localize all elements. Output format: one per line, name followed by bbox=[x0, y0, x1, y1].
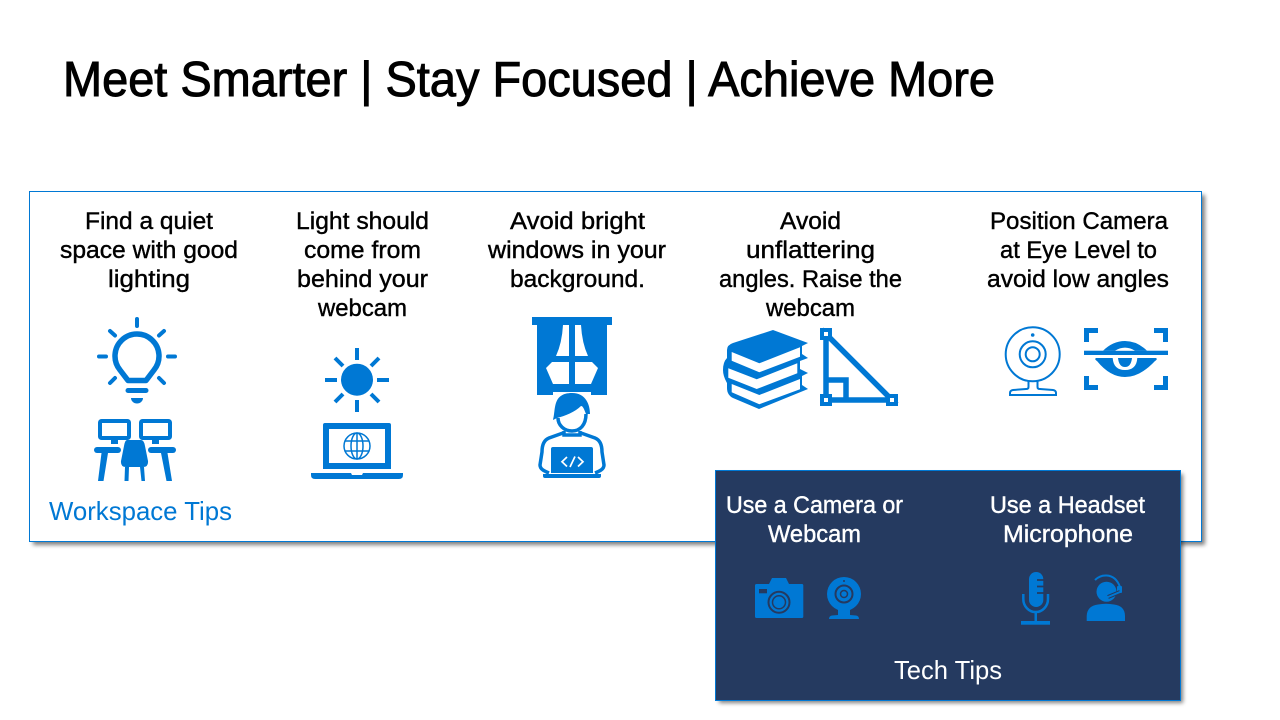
text: light behind webcam: Light should bbox=[296, 208, 429, 235]
icon: right triangle bbox=[820, 328, 898, 406]
icon: headset person bbox=[1087, 575, 1125, 621]
text: position camera at eye level: at Eye Level to bbox=[1000, 237, 1157, 264]
text: use a headset microphone: Microphone bbox=[1003, 521, 1133, 548]
icon: eye scan bbox=[1084, 328, 1168, 390]
title: Meet Smarter | Stay Focused | Achieve More bbox=[63, 53, 995, 107]
text: find a quiet space: space with good bbox=[60, 237, 238, 264]
text: find a quiet space: Find a quiet bbox=[85, 208, 213, 235]
text: light behind webcam: come from bbox=[304, 237, 421, 264]
text: position camera at eye level: avoid low angles bbox=[987, 266, 1169, 293]
label: workspace tips: Workspace Tips bbox=[49, 496, 232, 526]
icon: person with laptop bbox=[540, 393, 604, 478]
text: avoid unflattering angles: Avoid bbox=[780, 208, 841, 235]
text: use a headset microphone bbox=[990, 492, 1145, 548]
text: light behind webcam: behind your bbox=[297, 266, 428, 293]
icon: desks and chair bbox=[94, 421, 176, 481]
text: avoid bright windows: background. bbox=[510, 266, 645, 293]
icon: sun bbox=[325, 348, 389, 412]
text: avoid unflattering angles: angles. Raise the bbox=[719, 266, 902, 293]
text: use a camera or webcam: Webcam bbox=[768, 521, 861, 548]
label: tech tips: Tech Tips bbox=[894, 655, 1002, 685]
text: position camera at eye level: Position Camera bbox=[990, 208, 1169, 235]
text: find a quiet space bbox=[60, 208, 238, 293]
icon: webcam outline bbox=[1006, 327, 1060, 395]
panel: workspace tips bbox=[30, 192, 1205, 545]
text: find a quiet space: lighting bbox=[108, 266, 190, 293]
icon: camera bbox=[755, 578, 803, 618]
text: avoid bright windows: Avoid bright bbox=[510, 208, 645, 235]
icon: microphone bbox=[1021, 572, 1050, 625]
text: use a headset microphone: Use a Headset bbox=[990, 492, 1145, 519]
panel: tech tips bbox=[716, 470, 1183, 703]
icon: window with curtains bbox=[532, 317, 612, 395]
text: use a camera or webcam: Use a Camera or bbox=[726, 492, 903, 519]
text: avoid unflattering angles: webcam bbox=[765, 295, 855, 322]
text: avoid unflattering angles: unflattering bbox=[746, 237, 875, 264]
icon: webcam solid bbox=[827, 577, 861, 619]
text: avoid unflattering angles bbox=[719, 208, 902, 322]
icon: laptop with globe bbox=[311, 423, 403, 479]
text: use a camera or webcam bbox=[726, 492, 903, 548]
text: light behind webcam bbox=[296, 208, 429, 322]
text: light behind webcam: webcam bbox=[317, 295, 407, 322]
icon: stack of books bbox=[723, 330, 808, 409]
text: position camera at eye level bbox=[987, 208, 1169, 293]
text: avoid bright windows: windows in your bbox=[487, 237, 666, 264]
text: avoid bright windows bbox=[487, 208, 666, 293]
icon: light bulb bbox=[99, 319, 175, 404]
